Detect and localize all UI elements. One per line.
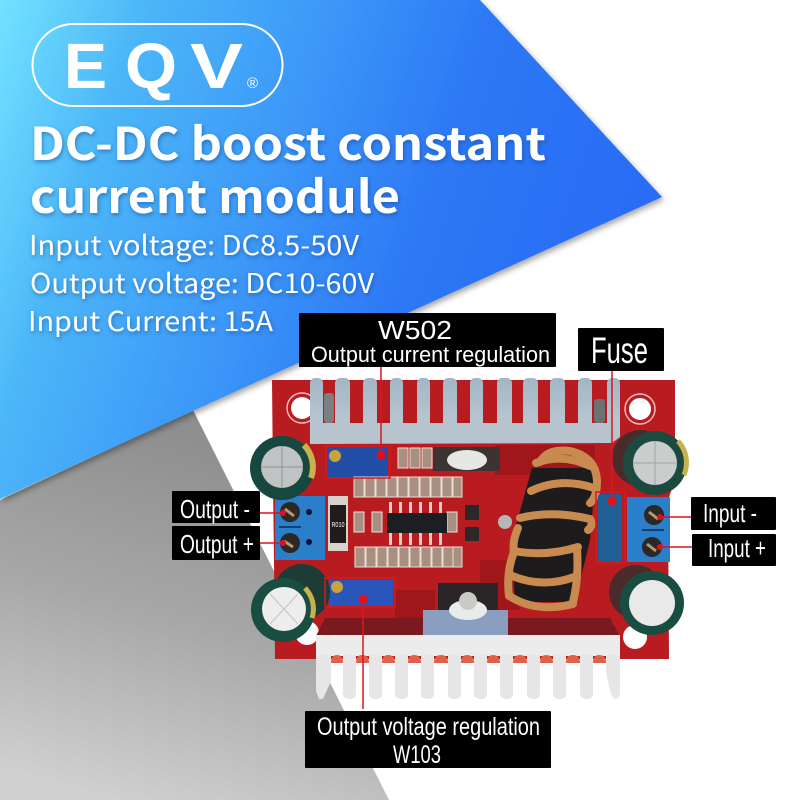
label: Output voltage regulation W103: W103 [393,741,441,769]
PCB shading traces [395,445,595,618]
PCB [272,380,675,659]
label: Output plus [172,526,260,560]
fuse [598,494,622,562]
shunt resistor R010 [328,496,348,551]
trimmer W502 [328,447,388,478]
transistors Q2 Q3 [465,505,479,541]
label: W502 output current regulation [299,313,556,367]
label: Output minus: Output - [180,494,250,524]
logo letter E: E [64,30,107,102]
label: Input plus: Input + [708,533,766,563]
specifications text: Input Current: 15A [28,300,274,339]
title: current module [30,161,400,226]
shadowed board edge above lower heat sink [316,618,620,636]
specifications text: Input voltage: DC8.5-50V [29,224,360,263]
title: DC-DC boost constant [30,108,546,173]
callout lines [260,367,692,709]
inductor coil [508,450,597,607]
label: Fuse: Fuse [591,330,648,371]
left terminal block [275,496,325,560]
logo letter V: V [190,30,243,102]
regulator bottom with screw [423,583,508,635]
capacitor top left [250,436,314,500]
IC chip [387,502,447,545]
circuit board module [250,378,687,699]
label: Output voltage regulation W103 [305,711,551,769]
background: gray diagonal panel [0,410,389,800]
label: W502 output current regulation: Output current regulation [311,342,550,367]
shunt resistor R010: R010 [332,522,345,529]
label: Input plus [692,533,776,566]
label: Input minus: Input - [703,498,757,528]
capacitor top right [612,430,687,495]
background: blue gradient panel [0,0,662,499]
metal standoff [498,515,512,529]
specifications text [28,224,374,339]
top heat sink [310,378,620,444]
label: Output voltage regulation W103: Output voltage regulation [317,713,540,741]
registered mark: ® [247,75,258,92]
callout dots [280,450,663,604]
slot tops [331,655,606,663]
logo: EQV badge [32,24,282,106]
capacitor bottom left [251,564,330,642]
logo letter Q: Q [125,30,177,102]
label: W502 output current regulation: W502 [378,315,452,345]
title [30,108,546,226]
bottom heat sink [316,635,620,699]
capacitor bottom right [609,565,684,635]
SMD component rows [354,448,462,567]
specifications text: Output voltage: DC10-60V [30,262,374,301]
mounting holes [287,393,655,649]
right terminal block [627,497,670,562]
label: Output plus: Output + [180,529,254,559]
regulator top with screw [433,447,500,471]
trimmer W103 [329,580,393,606]
